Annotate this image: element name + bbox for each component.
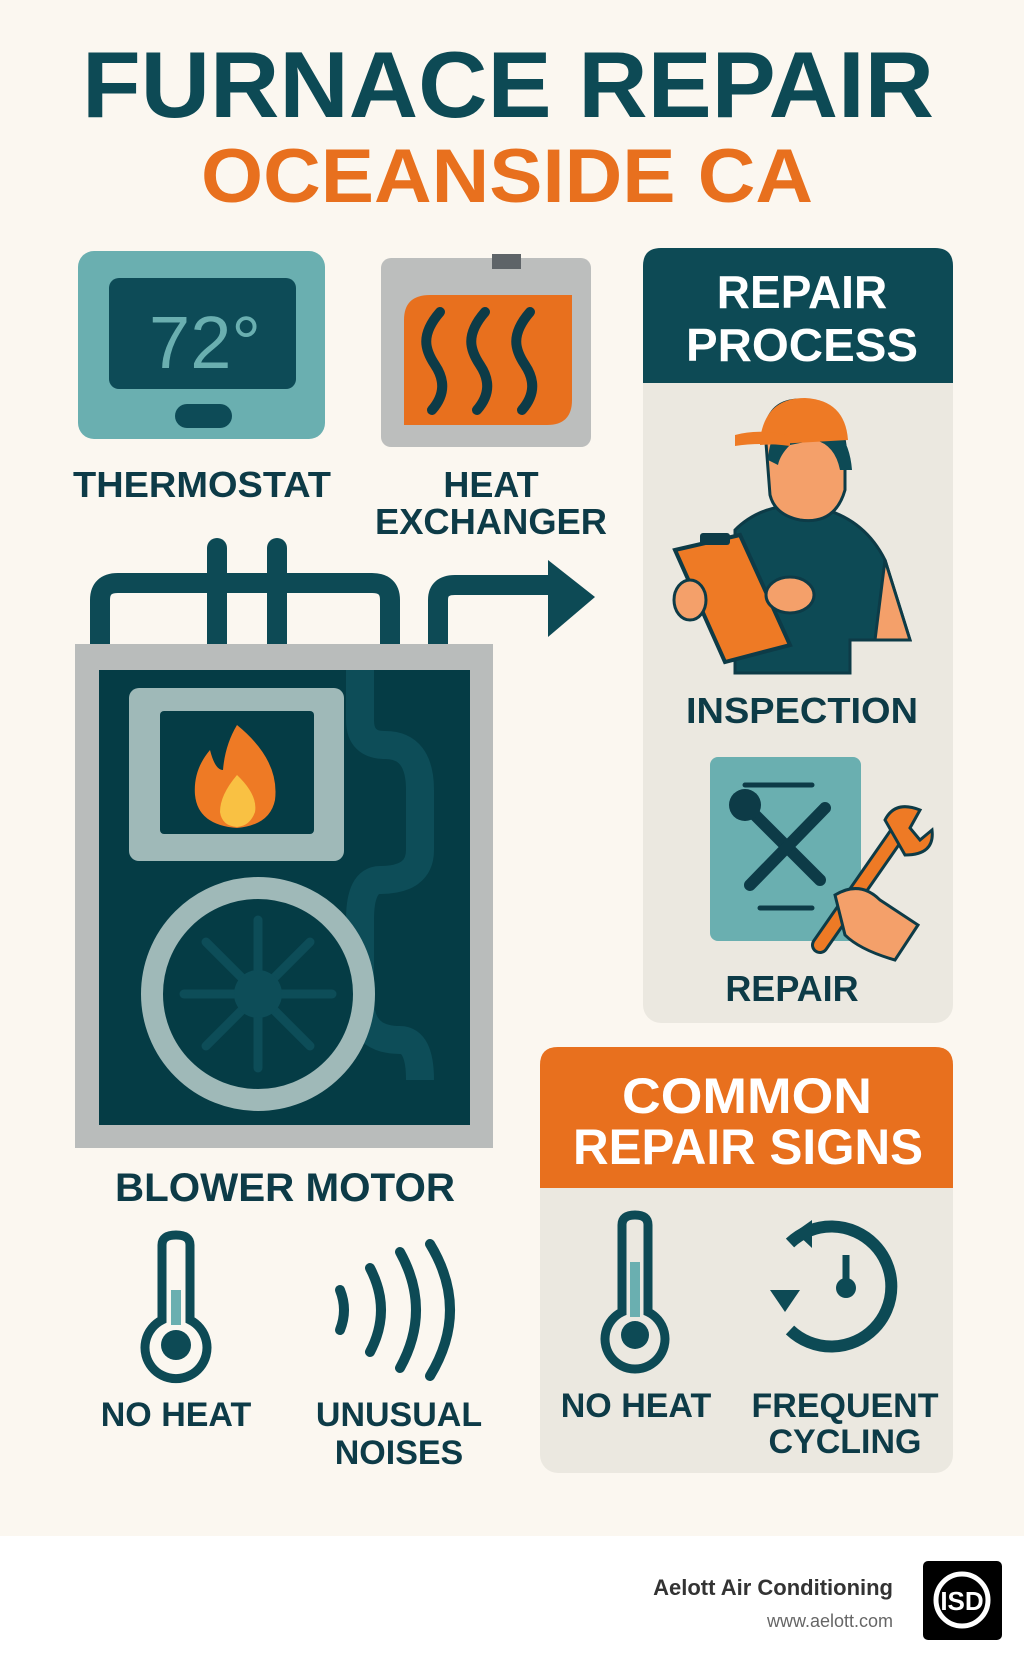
label: unusual noises: NOISES — [335, 1434, 463, 1472]
panel heading: common repair signs — [573, 1068, 923, 1175]
label: no heat: NO HEAT — [101, 1396, 251, 1434]
footer: logo: ISD — [940, 1586, 984, 1616]
title: FURNACE REPAIR — [82, 32, 934, 137]
label: inspection: INSPECTION — [686, 690, 918, 731]
panel: repair process — [643, 248, 953, 1023]
icon: thermometer (no heat) — [145, 1235, 207, 1379]
furnace: blower motor — [75, 644, 493, 1148]
panel heading: repair process: REPAIR — [717, 266, 887, 318]
icon: heat exchanger — [381, 254, 591, 447]
label: frequent cycling — [752, 1387, 939, 1461]
icon: thermometer — [605, 1215, 665, 1369]
flame window — [129, 688, 344, 861]
icon: repair tools — [710, 757, 932, 960]
label: frequent cycling: FREQUENT — [752, 1387, 939, 1425]
label: repair: REPAIR — [725, 968, 859, 1009]
label: thermostat: THERMOSTAT — [73, 464, 331, 505]
icon: cycling clock — [770, 1220, 891, 1346]
label: no heat: NO HEAT — [561, 1387, 711, 1425]
panel heading: repair process — [686, 266, 918, 371]
label: frequent cycling: CYCLING — [768, 1423, 922, 1461]
panel heading: common repair signs: COMMON — [622, 1068, 872, 1124]
label: heat exchanger: EXCHANGER — [375, 501, 607, 542]
label: heat exchanger: HEAT — [443, 464, 539, 505]
subtitle: OCEANSIDE CA — [201, 134, 813, 219]
panel: common repair signs — [540, 1047, 953, 1473]
icon: thermostat: 72° — [149, 301, 261, 384]
footer: url: www.aelott.com — [766, 1611, 893, 1631]
label: unusual noises — [316, 1396, 482, 1472]
footer: company name: Aelott Air Conditioning — [653, 1575, 893, 1600]
footer: logo — [923, 1561, 1002, 1640]
icon: sound waves — [340, 1244, 450, 1376]
icon: thermostat — [78, 251, 325, 439]
arrow — [548, 560, 595, 637]
panel heading: repair process: PROCESS — [686, 319, 918, 371]
label: heat exchanger — [375, 464, 607, 542]
panel heading: common repair signs: REPAIR SIGNS — [573, 1119, 923, 1175]
footer — [0, 1536, 1024, 1666]
fan — [152, 888, 364, 1100]
icon: technician with clipboard — [674, 398, 910, 673]
label: blower motor: BLOWER MOTOR — [115, 1166, 455, 1210]
label: unusual noises: UNUSUAL — [316, 1396, 482, 1434]
icon: furnace pipes — [100, 548, 555, 644]
